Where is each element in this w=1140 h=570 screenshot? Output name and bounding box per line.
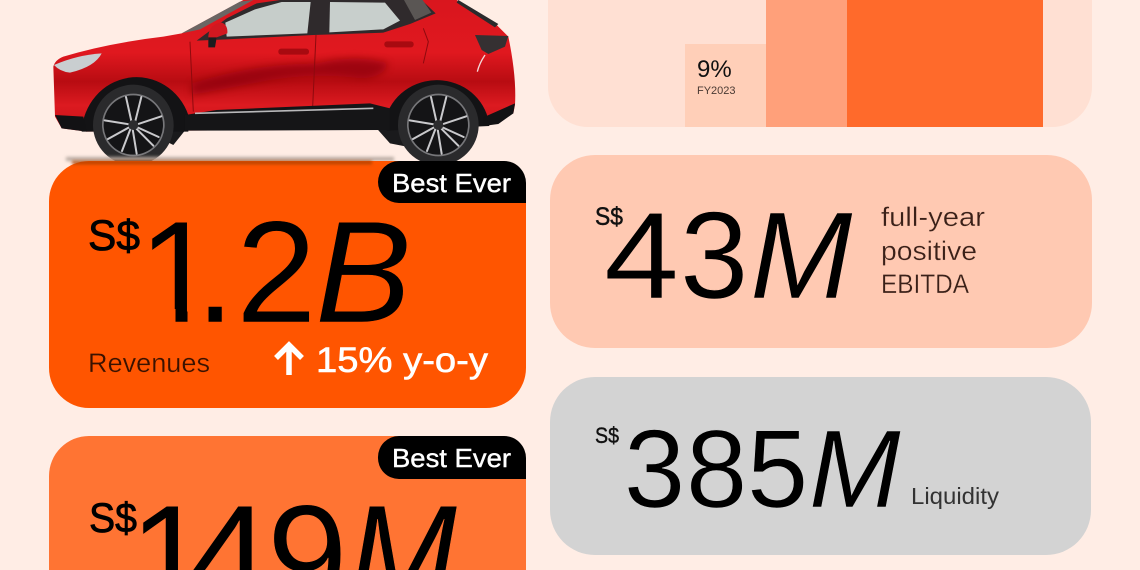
liquidity label: Liquidity [911, 483, 1000, 509]
badge: best ever [378, 436, 526, 479]
currency label: S$ [88, 212, 140, 260]
door handles and seams [278, 41, 414, 55]
bar: latest year [847, 0, 1043, 127]
revenue value: B [315, 191, 412, 353]
window frame [197, 0, 436, 41]
panel: 149M card [49, 436, 526, 570]
tail light [475, 35, 508, 54]
car shadow [66, 157, 394, 161]
body reflection [192, 58, 388, 95]
rear crease highlight [477, 55, 485, 72]
icon: up arrow [276, 345, 302, 375]
rear lower trim [483, 103, 515, 126]
EBITDA label: positive [881, 236, 977, 266]
wheel arches [82, 77, 188, 132]
car body [53, 0, 515, 132]
EBITDA value: 4 [604, 188, 679, 325]
liquidity value: 385 [624, 408, 808, 531]
EBITDA label [881, 202, 985, 299]
EBITDA value: 3 [680, 188, 748, 325]
badge: best ever: Best Ever [392, 168, 511, 198]
panel: EBITDA [550, 155, 1092, 348]
revenue value: .2 [195, 191, 317, 353]
EBITDA label: EBITDA [881, 269, 969, 299]
panel: revenues [49, 161, 526, 408]
under-body shadow parts [163, 128, 407, 147]
EBITDA value: M [750, 188, 853, 325]
spoiler [457, 0, 498, 27]
panel: liquidity [550, 377, 1091, 555]
front window [225, 2, 311, 37]
panel: margin bar chart [548, 0, 1092, 127]
revenues label: Revenues [88, 348, 210, 378]
icon: red car [53, 0, 515, 165]
front lower trim [55, 115, 87, 132]
badge: best ever: Best Ever [392, 443, 511, 473]
rear window [329, 2, 400, 32]
quarter window [404, 0, 431, 20]
currency label: S$ [595, 203, 623, 231]
EBITDA label: full-year [881, 202, 985, 232]
bar: FY2023 [685, 44, 766, 127]
revenue value: 1 [138, 191, 219, 353]
badge: best ever [378, 161, 526, 203]
sill [185, 103, 390, 131]
growth figure: 15% y-o-y [316, 341, 489, 380]
mirror [208, 23, 227, 47]
liquidity value: M [809, 408, 901, 531]
bar: middle year [766, 0, 847, 127]
bar: FY2023: FY2023 [697, 85, 736, 97]
revenue value [138, 191, 412, 353]
headlight [54, 53, 102, 73]
currency label: S$ [89, 494, 137, 541]
windscreen [182, 0, 253, 33]
currency label: S$ [595, 423, 619, 448]
bar: FY2023: 9% [697, 56, 732, 83]
